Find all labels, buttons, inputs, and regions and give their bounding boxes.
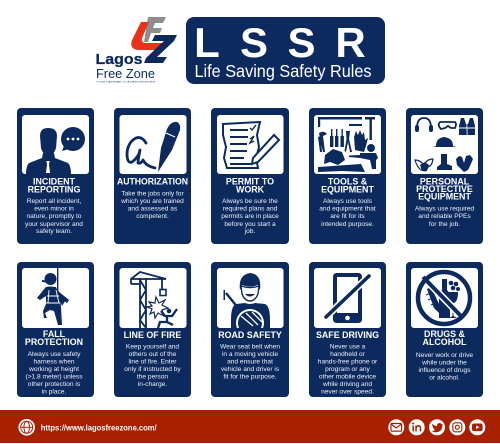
heading: EQUIPMENT bbox=[418, 192, 471, 202]
heading: WORK bbox=[236, 184, 265, 194]
description: in-charge. bbox=[138, 381, 167, 388]
description: in a moving vehicle bbox=[222, 351, 278, 358]
description bbox=[120, 190, 184, 220]
description: nature, promptly to bbox=[27, 213, 82, 220]
description: (>1.8 meter) unless bbox=[26, 374, 83, 380]
icon: protective gear bbox=[415, 118, 475, 172]
description: even minor in bbox=[34, 206, 74, 212]
title letters: S bbox=[240, 19, 268, 66]
description: and reliable PPEs bbox=[418, 213, 471, 220]
description: while under the bbox=[421, 360, 467, 366]
icon: seat-belted driver bbox=[224, 273, 270, 328]
description: Never work or drive bbox=[416, 352, 473, 359]
panel: personal protective equipment bbox=[406, 108, 483, 244]
description bbox=[220, 344, 280, 380]
title letters: L bbox=[194, 19, 220, 66]
description: and equipment that bbox=[319, 206, 376, 212]
panel: tools and equipment bbox=[309, 108, 386, 244]
description: Always use safety bbox=[28, 351, 81, 358]
description: or alcohol. bbox=[429, 374, 460, 382]
description bbox=[319, 198, 376, 228]
description: Take the jobs only for bbox=[121, 190, 184, 198]
description: for the job. bbox=[429, 221, 460, 228]
footer bar bbox=[0, 410, 500, 443]
heading: FALL bbox=[43, 329, 66, 339]
panel: fall protection bbox=[17, 262, 94, 397]
description: program or any bbox=[325, 366, 371, 373]
heading: ROAD SAFETY bbox=[218, 330, 282, 340]
description: hands-free phone or bbox=[318, 358, 378, 366]
description: while driving and bbox=[322, 381, 372, 388]
panel: incident reporting bbox=[17, 108, 94, 244]
title panel: LSSR bbox=[186, 17, 385, 84]
description: and assessed as bbox=[128, 206, 178, 212]
heading: PERSONAL bbox=[420, 176, 470, 186]
description: influence of drugs bbox=[418, 367, 471, 374]
description bbox=[25, 198, 83, 235]
description: your supervisor and bbox=[25, 221, 83, 228]
title letters: S bbox=[287, 19, 316, 66]
heading bbox=[416, 176, 473, 202]
heading: PROTECTION bbox=[25, 337, 83, 347]
icon: twitter bbox=[429, 419, 445, 435]
description bbox=[416, 352, 473, 382]
heading: LINE OF FIRE bbox=[124, 330, 181, 340]
panel: permit to work bbox=[211, 108, 289, 244]
icon: email bbox=[388, 419, 404, 435]
description: which you are trained bbox=[120, 198, 184, 205]
description: are fit for its bbox=[330, 213, 365, 220]
heading: AUTHORIZATION bbox=[117, 176, 188, 186]
website url: https://www.lagosfreezone.com/ bbox=[41, 422, 157, 432]
heading: PROTECTIVE bbox=[416, 184, 473, 194]
icon: person with speech bubble bbox=[26, 127, 85, 174]
heading bbox=[423, 329, 467, 347]
logo wordmark bbox=[96, 51, 156, 84]
panel: line of fire bbox=[114, 262, 191, 397]
description: the person bbox=[137, 374, 168, 380]
description: only if instructed by bbox=[124, 366, 181, 373]
heading: PERMIT TO bbox=[226, 176, 274, 186]
panel: road safety bbox=[211, 262, 289, 397]
description: Report all incident, bbox=[27, 198, 81, 205]
logo: Lagos Free Zone bbox=[96, 17, 177, 84]
description bbox=[124, 344, 181, 388]
icon: instagram bbox=[449, 419, 465, 435]
icon: crossed-out phone bbox=[326, 273, 369, 323]
heading bbox=[28, 176, 80, 194]
heading bbox=[321, 176, 374, 194]
icon: worker in harness bbox=[37, 268, 69, 325]
title letters: R bbox=[335, 19, 366, 66]
logo wordmark: Free Zone bbox=[96, 67, 155, 81]
panel: safe driving bbox=[309, 262, 386, 397]
subtitle: Life Saving Safety Rules bbox=[194, 61, 372, 81]
logo wordmark: Lagos bbox=[96, 51, 142, 68]
heading: DRUGS & bbox=[424, 329, 466, 339]
description: Always use required bbox=[415, 206, 475, 212]
description: other protection is bbox=[28, 381, 81, 388]
icon: globe bbox=[18, 419, 35, 436]
description bbox=[26, 351, 83, 396]
description: fit for the purpose. bbox=[223, 374, 277, 380]
description: and ensure that bbox=[227, 358, 273, 366]
icon: checklist and pencil bbox=[223, 122, 279, 168]
logo wordmark: YOUR GATEWAY TO A NEW FRONTIER bbox=[96, 80, 156, 84]
heading: SAFE DRIVING bbox=[316, 330, 379, 340]
description: job. bbox=[244, 228, 255, 235]
heading: INCIDENT bbox=[33, 176, 76, 186]
description: required plans and bbox=[223, 206, 278, 212]
heading bbox=[226, 176, 274, 194]
icon: prohibited drugs and alcohol bbox=[418, 272, 470, 324]
panel: authorization bbox=[114, 108, 191, 244]
description bbox=[318, 344, 378, 396]
icon: linkedin bbox=[409, 419, 425, 435]
heading: EQUIPMENT bbox=[321, 184, 374, 194]
description: permits are in place bbox=[221, 213, 279, 220]
description: harness when bbox=[33, 358, 75, 366]
description: Always use tools bbox=[323, 198, 373, 205]
icon: youtube bbox=[469, 419, 485, 435]
description: handheld or bbox=[330, 351, 366, 358]
description: other mobile device bbox=[319, 374, 376, 380]
description: vehicle and driver is bbox=[221, 366, 280, 373]
description: intended purpose. bbox=[321, 221, 374, 228]
description bbox=[415, 206, 475, 228]
description bbox=[221, 198, 279, 235]
heading: ALCOHOL bbox=[423, 337, 467, 347]
description: Always be sure the bbox=[222, 198, 278, 205]
title letters bbox=[194, 19, 366, 66]
heading bbox=[25, 329, 83, 347]
description: line of fire. Enter bbox=[128, 358, 177, 366]
description: Wear seat belt when bbox=[220, 344, 280, 350]
panel: drugs and alcohol bbox=[406, 262, 483, 397]
description: in place. bbox=[42, 388, 66, 396]
description: Keep yourself and bbox=[126, 344, 179, 350]
description: Never use a bbox=[330, 344, 366, 350]
logo mark: LFZ bbox=[131, 17, 177, 63]
description: safety team. bbox=[36, 228, 72, 235]
description: others out of the bbox=[129, 351, 177, 358]
description: working at height bbox=[28, 366, 79, 373]
heading: TOOLS & bbox=[328, 176, 368, 186]
description: never over speed. bbox=[321, 388, 374, 396]
description: before you start a bbox=[224, 221, 276, 228]
icon: assorted tools bbox=[318, 117, 378, 172]
icon: crane and falling load bbox=[131, 272, 177, 328]
icon: signature and pen bbox=[127, 122, 180, 172]
description: competent. bbox=[136, 213, 169, 220]
heading: REPORTING bbox=[28, 184, 80, 194]
